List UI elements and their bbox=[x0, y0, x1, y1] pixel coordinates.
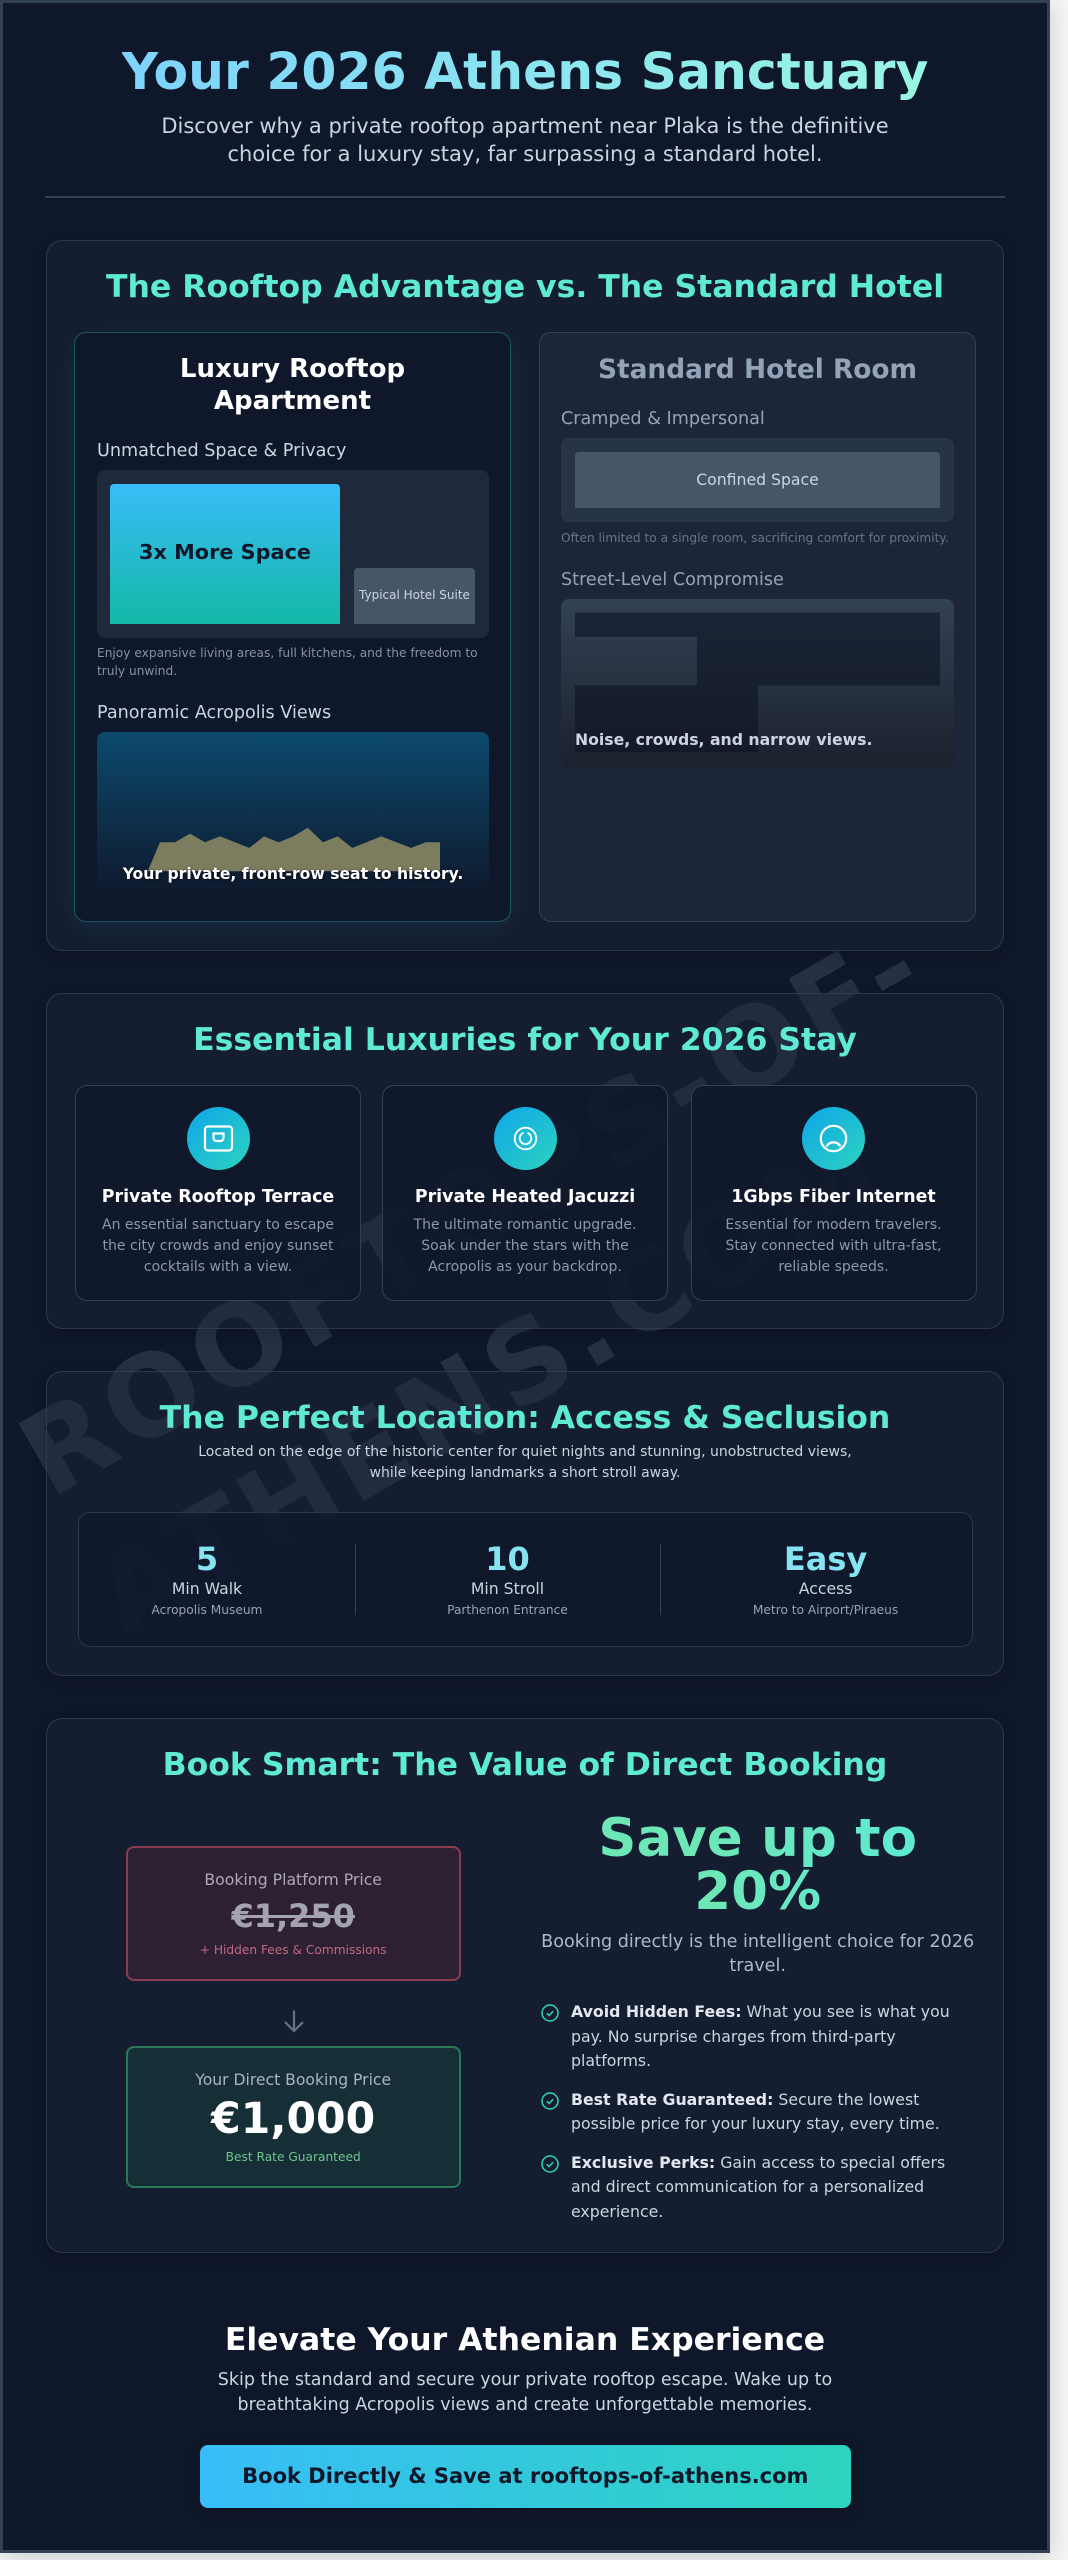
caption bbox=[97, 646, 478, 678]
card heading bbox=[180, 354, 405, 416]
value: 5 bbox=[196, 1540, 218, 1578]
card text: Essential for modern travelers. bbox=[725, 1217, 942, 1233]
card text: reliable speeds. bbox=[778, 1259, 889, 1275]
panel: direct booking bbox=[46, 1718, 1004, 2253]
benefit: hidden fees bbox=[541, 2002, 950, 2070]
card: terrace bbox=[75, 1085, 361, 1301]
intro text: Located on the edge of the historic center for quiet nights and stunning, unobstructed views, bbox=[198, 1444, 852, 1460]
card text bbox=[725, 1217, 942, 1275]
card text: Stay connected with ultra-fast, bbox=[726, 1238, 941, 1254]
view caption: Your private, front-row seat to history. bbox=[123, 865, 463, 883]
cta heading: Elevate Your Athenian Experience bbox=[225, 2322, 825, 2358]
cta text: Skip the standard and secure your private rooftop escape. Wake up to bbox=[218, 2370, 832, 2390]
benefit text bbox=[571, 2153, 945, 2221]
savings headline: 20% bbox=[694, 1860, 821, 1922]
benefit text: Exclusive Perks: Gain access to special offers bbox=[571, 2153, 945, 2172]
stat: metro bbox=[753, 1540, 898, 1617]
subtitle bbox=[161, 114, 889, 166]
card text: the city crowds and enjoy sunset bbox=[103, 1238, 333, 1254]
heading: The Rooftop Advantage vs. The Standard Hotel bbox=[106, 269, 944, 305]
destination: Metro to Airport/Piraeus bbox=[753, 1603, 898, 1617]
subtitle: choice for a luxury stay, far surpassing a standard hotel. bbox=[227, 142, 823, 166]
icon: check bbox=[541, 2155, 559, 2173]
cta button bbox=[200, 2445, 851, 2508]
destination: Parthenon Entrance bbox=[447, 1603, 568, 1617]
card text bbox=[413, 1217, 636, 1275]
savings text bbox=[541, 1932, 974, 1976]
chart: space comparison bbox=[97, 470, 489, 638]
value: 10 bbox=[485, 1540, 530, 1578]
benefit text: experience. bbox=[571, 2202, 663, 2221]
caption: Enjoy expansive living areas, full kitchens, and the freedom to bbox=[97, 646, 478, 660]
bar: confined space bbox=[575, 452, 940, 508]
benefit text: and direct communication for a personalized bbox=[571, 2177, 924, 2196]
bar: 3x more space: 3x More Space bbox=[139, 540, 311, 564]
benefit text: Best Rate Guaranteed: Secure the lowest bbox=[571, 2090, 919, 2109]
savings text: Booking directly is the intelligent choice for 2026 bbox=[541, 1932, 974, 1952]
price: €1,000 bbox=[211, 2095, 375, 2144]
bar: typical hotel suite bbox=[354, 568, 475, 624]
value: Easy bbox=[784, 1540, 867, 1578]
label: space: Unmatched Space & Privacy bbox=[97, 440, 346, 460]
savings headline bbox=[588, 1812, 928, 1918]
bar: typical hotel suite: Typical Hotel Suite bbox=[359, 588, 470, 602]
bar: 3x more space bbox=[110, 484, 340, 624]
card title: 1Gbps Fiber Internet bbox=[731, 1187, 936, 1207]
price label: Your Direct Booking Price bbox=[195, 2071, 391, 2089]
illustration: street view bbox=[561, 599, 954, 766]
bar: confined space: Confined Space bbox=[696, 470, 819, 489]
panel: rooftop advantage comparison bbox=[46, 240, 1004, 951]
card text: Acropolis as your backdrop. bbox=[428, 1259, 622, 1275]
icon: jacuzzi bbox=[494, 1107, 556, 1170]
watermark: ROOFTOPS-OF- bbox=[0, 900, 948, 1523]
card: fiber bbox=[690, 1085, 976, 1301]
unit: Access bbox=[799, 1579, 852, 1598]
call to action bbox=[200, 2322, 851, 2508]
icon: terrace bbox=[186, 1107, 250, 1170]
panel: location bbox=[46, 1371, 1004, 1676]
unit: Min Stroll bbox=[471, 1579, 544, 1598]
heading: Essential Luxuries for Your 2026 Stay bbox=[193, 1022, 857, 1058]
label: street level: Street-Level Compromise bbox=[561, 570, 784, 590]
icon: check bbox=[541, 2092, 559, 2110]
icon: fiber internet bbox=[802, 1107, 865, 1170]
intro text: while keeping landmarks a short stroll away. bbox=[370, 1465, 680, 1481]
card heading: Standard Hotel Room bbox=[598, 354, 917, 384]
card heading: Luxury Rooftop bbox=[180, 354, 405, 384]
benefit text bbox=[571, 2090, 940, 2133]
cta text bbox=[218, 2370, 832, 2415]
card title: Private Rooftop Terrace bbox=[102, 1187, 334, 1207]
unit: Min Walk bbox=[172, 1579, 242, 1598]
savings headline: Save up to bbox=[598, 1808, 917, 1868]
price box: direct bbox=[126, 2046, 461, 2188]
destination: Acropolis Museum bbox=[152, 1603, 262, 1617]
label: cramped: Cramped & Impersonal bbox=[561, 409, 765, 429]
price note: + Hidden Fees & Commissions bbox=[200, 1943, 387, 1957]
panel: luxury rooftop apartment bbox=[74, 332, 511, 922]
card: jacuzzi bbox=[382, 1085, 668, 1301]
savings text: travel. bbox=[729, 1956, 786, 1976]
watermark: ATHENS.COM bbox=[73, 1105, 909, 1663]
card title: Private Heated Jacuzzi bbox=[415, 1187, 635, 1207]
price note: Best Rate Guaranteed bbox=[226, 2150, 361, 2164]
benefit text bbox=[571, 2002, 950, 2070]
intro text bbox=[198, 1444, 852, 1481]
label: views: Panoramic Acropolis Views bbox=[97, 703, 331, 723]
stats panel bbox=[78, 1512, 973, 1647]
illustration: confined space bbox=[561, 438, 954, 522]
benefit text: possible price for your luxury stay, every time. bbox=[571, 2114, 940, 2133]
card text: Soak under the stars with the bbox=[421, 1238, 629, 1254]
street caption: Noise, crowds, and narrow views. bbox=[575, 730, 872, 748]
price label: Booking Platform Price bbox=[204, 1870, 382, 1889]
cta text: breathtaking Acropolis views and create unforgettable memories. bbox=[238, 2395, 812, 2415]
card text: The ultimate romantic upgrade. bbox=[414, 1217, 636, 1233]
card heading: Apartment bbox=[214, 386, 371, 416]
title: Your 2026 Athens Sanctuary bbox=[122, 42, 928, 101]
caption: Often limited to a single room, sacrificing comfort for proximity. bbox=[561, 531, 949, 545]
stat: parthenon bbox=[447, 1540, 568, 1617]
card text: cocktails with a view. bbox=[144, 1259, 292, 1275]
benefit text: pay. No surprise charges from third-party bbox=[571, 2027, 896, 2046]
header bbox=[45, 42, 1005, 198]
caption: truly unwind. bbox=[97, 664, 177, 678]
card text: An essential sanctuary to escape bbox=[102, 1217, 334, 1233]
price box: platform bbox=[126, 1846, 461, 1981]
cta button: Book Directly & Save at rooftops-of-athens.com bbox=[242, 2464, 808, 2488]
price: €1,250 bbox=[231, 1897, 355, 1935]
benefit: perks bbox=[541, 2153, 945, 2221]
stat: acropolis museum bbox=[152, 1540, 262, 1617]
panel: standard hotel room bbox=[539, 332, 976, 922]
icon: acropolis skyline bbox=[148, 828, 440, 872]
benefit text: Avoid Hidden Fees: What you see is what you bbox=[571, 2002, 950, 2021]
heading: The Perfect Location: Access & Seclusion bbox=[160, 1400, 890, 1436]
illustration: acropolis view bbox=[97, 732, 489, 900]
heading: Book Smart: The Value of Direct Booking bbox=[163, 1747, 887, 1783]
icon: buildings bbox=[575, 612, 940, 752]
card text bbox=[102, 1217, 334, 1275]
benefit text: platforms. bbox=[571, 2051, 651, 2070]
icon: check bbox=[541, 2004, 559, 2022]
benefit: best rate bbox=[541, 2090, 940, 2133]
panel: essential luxuries bbox=[46, 993, 1004, 1329]
subtitle: Discover why a private rooftop apartment near Plaka is the definitive bbox=[161, 114, 889, 138]
arrow bbox=[284, 2010, 304, 2032]
